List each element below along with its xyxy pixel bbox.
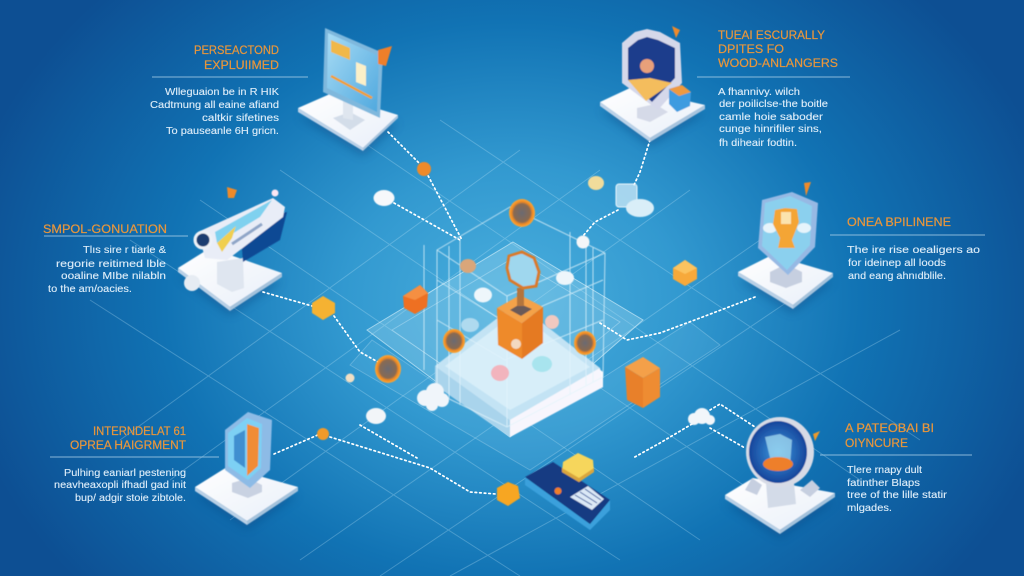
rose token <box>545 315 559 329</box>
heading <box>845 423 934 450</box>
body text: mlgades. <box>847 503 892 514</box>
panel: a pateobal oiyncure <box>725 417 972 534</box>
orange building <box>625 357 660 408</box>
heading <box>70 426 186 452</box>
heading: INTERNDELAT 61 <box>93 426 186 438</box>
body text: Wlleguaion be in R HIK <box>165 87 279 98</box>
icon: monitor on platform <box>298 28 398 151</box>
platform shadows <box>178 110 835 538</box>
orange token top left <box>417 162 431 176</box>
white dot <box>346 374 354 382</box>
heading: OPREA HAIGRMENT <box>70 440 186 452</box>
panel: personal explained <box>150 28 398 151</box>
small amber coin <box>317 428 329 440</box>
body text <box>847 465 948 514</box>
icon: capsule display on platform <box>195 412 298 525</box>
cyan token <box>532 356 552 372</box>
cloud right <box>688 408 715 425</box>
body text <box>54 468 186 504</box>
body text: bup/ adgir stoie zibtole. <box>75 493 186 504</box>
body text: fh diheair fodtin. <box>719 138 797 149</box>
white pill lower <box>366 408 386 424</box>
cloud <box>417 383 449 411</box>
white tokens inside cage <box>461 271 574 332</box>
coin top <box>509 199 535 227</box>
body text: To pauseanle 6H gricn. <box>166 126 279 137</box>
icon: scanner on platform <box>178 190 287 311</box>
heading <box>194 45 279 72</box>
translucent floor plate <box>350 242 720 470</box>
body text: for ideinep all loods <box>848 258 946 269</box>
body text: fatinther Blaps <box>847 478 920 489</box>
body text: The ire rise oealigers ao <box>847 245 981 256</box>
body text: ooaline MIbe nilabln <box>61 271 166 282</box>
tan token <box>460 259 476 273</box>
body text: der poiliclse-the boitle <box>719 99 828 110</box>
body text <box>718 87 828 149</box>
coin right <box>574 331 596 355</box>
panel: onea opilinene <box>738 182 985 309</box>
body text: camle hoie saboder <box>719 112 824 123</box>
device: phone with yellow hexagon <box>497 453 610 530</box>
glass cage <box>424 207 605 427</box>
icon: round mirror on platform <box>725 417 835 534</box>
heading: TUEAI ESCURALLY <box>718 30 825 42</box>
body text: and eang ahnıdblile. <box>848 271 946 282</box>
orange cube left <box>403 285 428 314</box>
body text: Tlıs sire r tiarle & <box>83 245 166 256</box>
heading <box>718 30 838 70</box>
panel: simpol-gonuation <box>43 190 287 311</box>
heading: PERSEACTOND <box>194 45 279 57</box>
coin left <box>443 329 465 353</box>
body text <box>847 245 981 282</box>
heading: ONEA BPILINENE <box>847 217 951 229</box>
heading: SMPOL-GONUATION <box>43 224 167 236</box>
central hub: glass platform and cube <box>424 207 605 437</box>
base platform <box>435 303 603 437</box>
heading: DPITES FO <box>718 44 784 56</box>
body text: Tlere rnapy dult <box>847 465 922 476</box>
white pill left <box>374 190 394 206</box>
body text <box>48 245 167 295</box>
ice cube <box>616 184 654 217</box>
icon: arch window on platform <box>600 26 705 142</box>
amber cube left <box>312 296 335 320</box>
body text: cunge hinrifiler sins, <box>719 124 822 135</box>
body text: Pulhing eaniarl pestening <box>64 468 186 479</box>
coin lower left <box>375 355 401 383</box>
body text: tree of the lille statir <box>847 490 948 501</box>
dotted connectors <box>263 132 755 494</box>
body text: A fhannivy. wilch <box>718 87 800 98</box>
pink token <box>491 365 509 381</box>
yellow pill <box>588 176 604 190</box>
heading: EXPLUIIMED <box>204 60 279 72</box>
body text: regorie reitimed lble <box>56 259 167 270</box>
panel: tual escurally <box>600 26 850 149</box>
floating tokens <box>227 162 715 440</box>
body text: Cadtmung all eaine afiand <box>150 100 279 111</box>
body text: to the am/oacies. <box>48 284 132 295</box>
amber cube right <box>673 260 697 286</box>
white ball <box>576 236 590 248</box>
body text: caltkir sifetines <box>202 113 279 124</box>
body text: neavheaxopli ifhadl gad init <box>54 480 186 491</box>
body text <box>150 87 279 137</box>
heading: WOOD-ANLANGERS <box>718 58 838 70</box>
panel: intermediate open management <box>50 412 298 525</box>
heading: A PATEOBAI BI <box>845 423 934 435</box>
heading: OIYNCURE <box>845 438 908 450</box>
small orange gem <box>227 187 237 198</box>
icon: shield on platform <box>738 182 833 309</box>
orange cube <box>497 288 543 359</box>
hexagonal frame <box>507 252 539 288</box>
